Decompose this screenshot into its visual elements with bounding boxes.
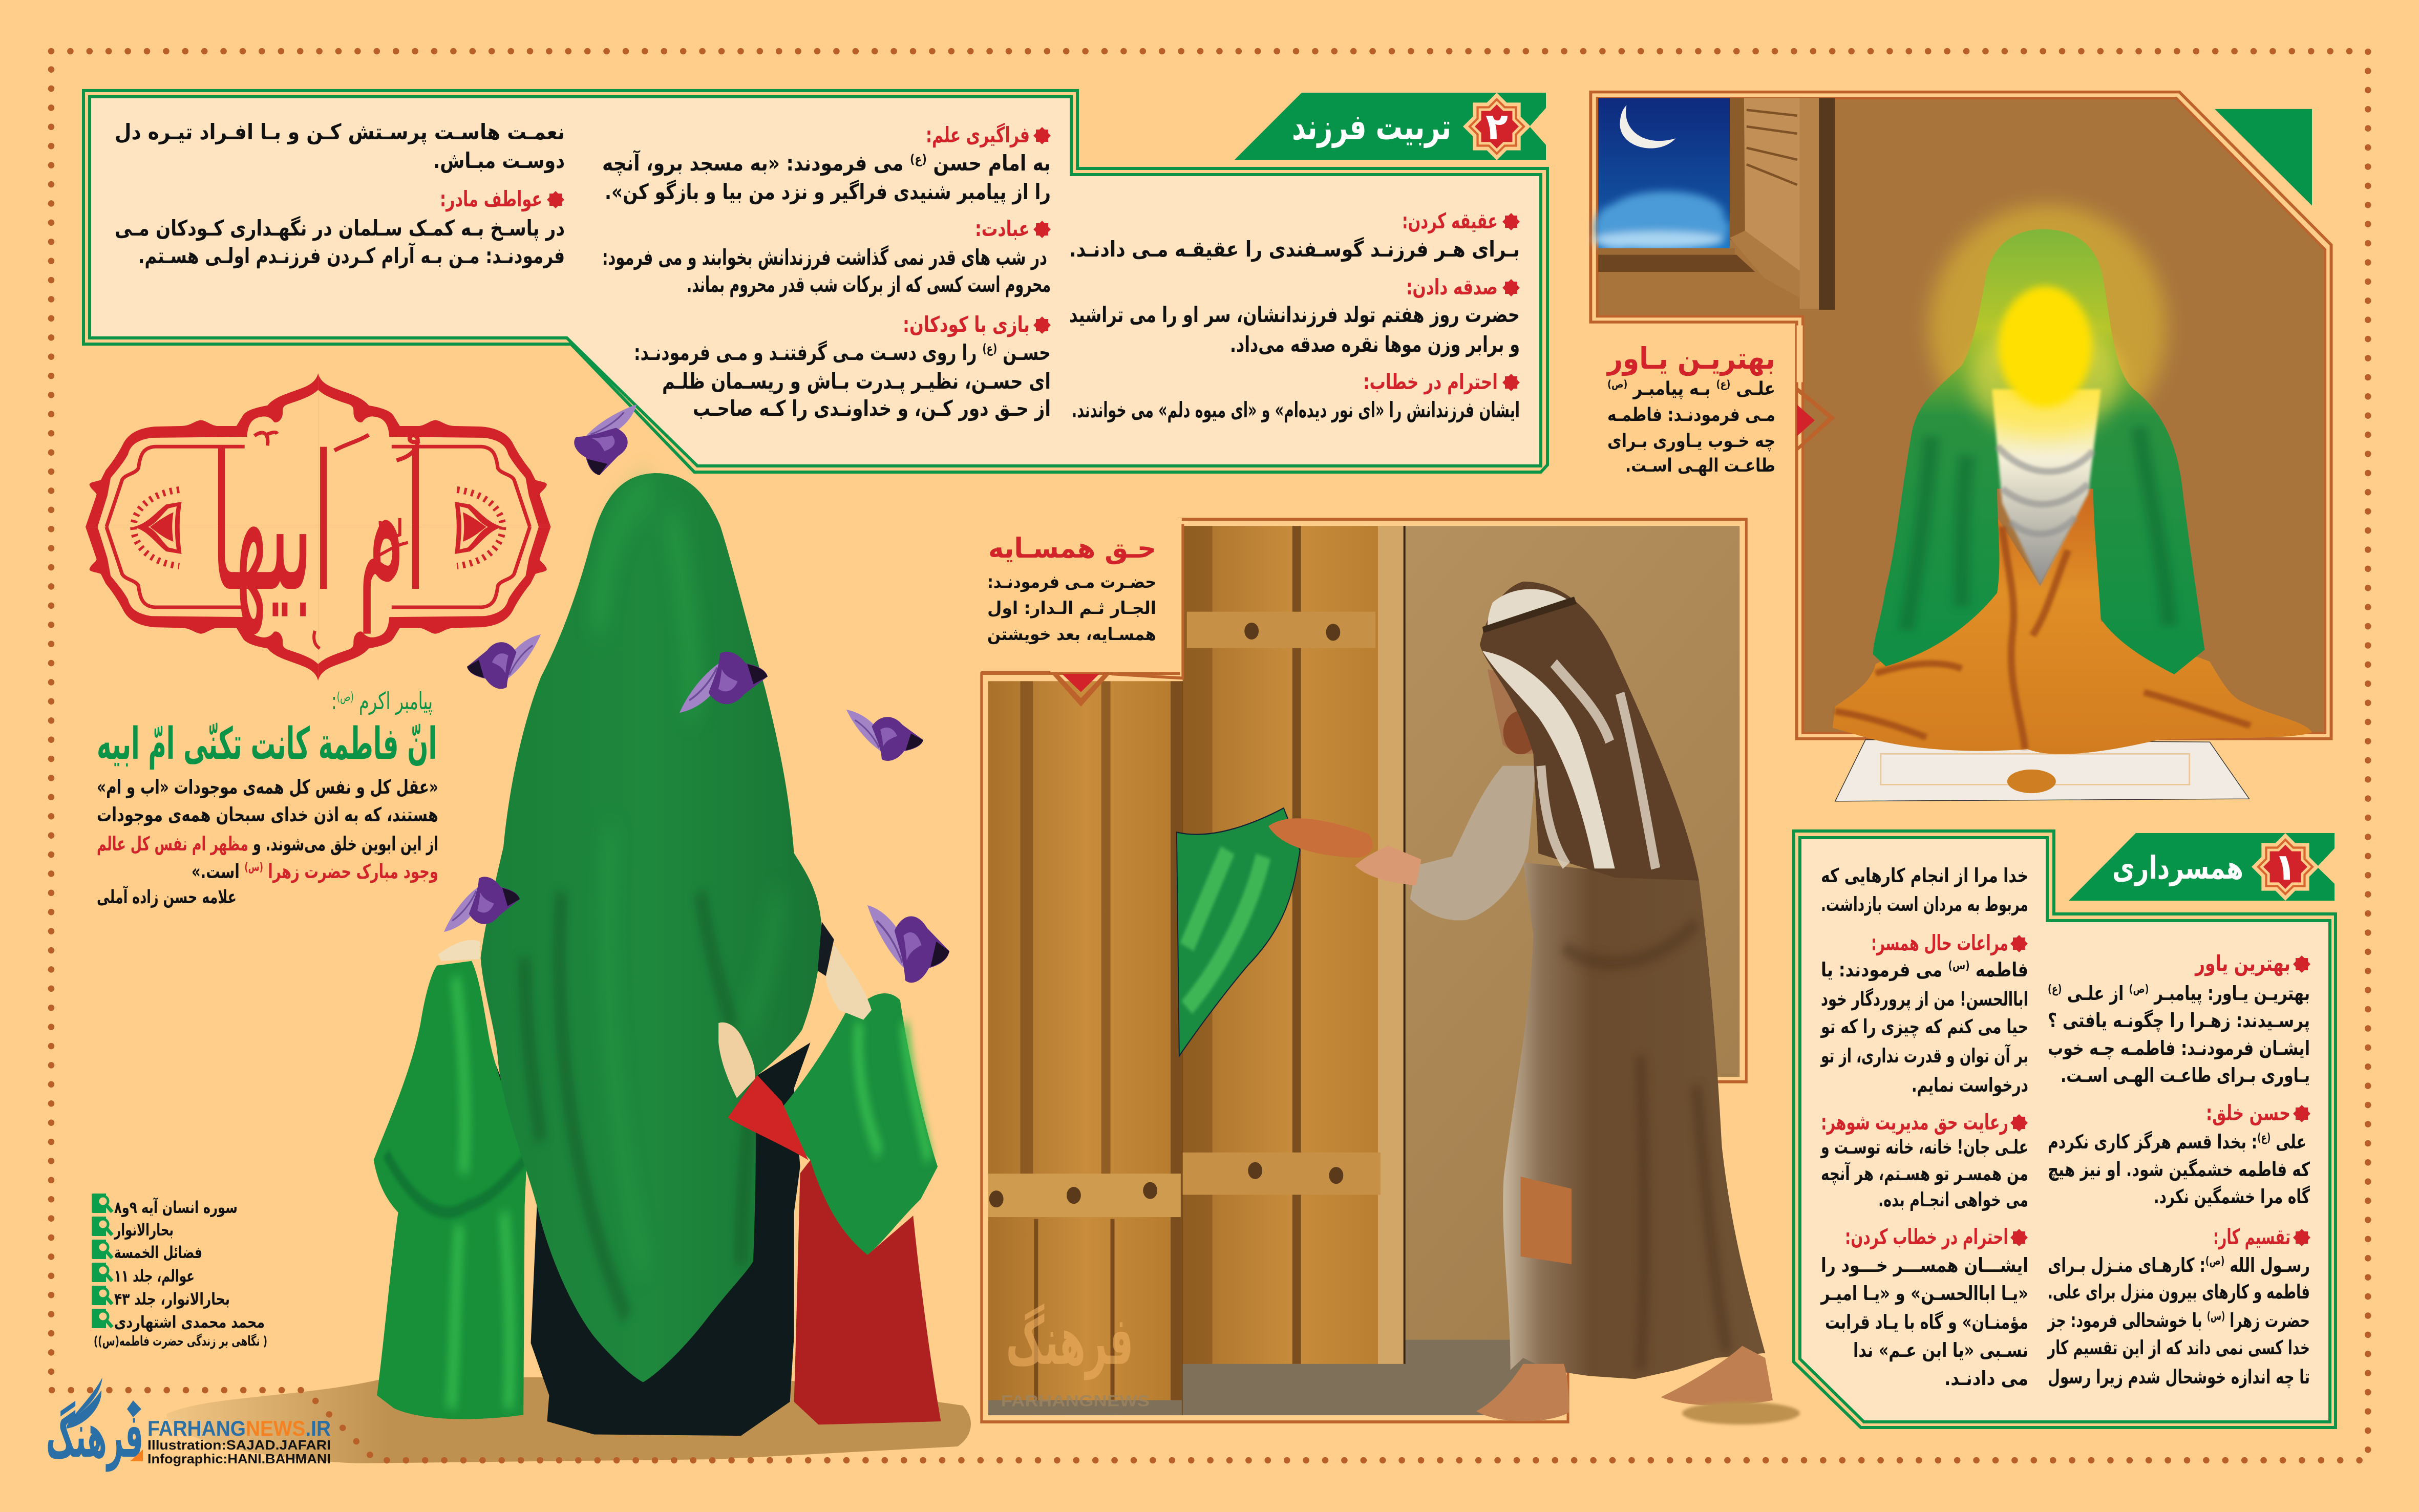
watermark: فرهنگ bbox=[1006, 1303, 1133, 1380]
text column 2 bbox=[602, 122, 1051, 421]
mother's green mantle bbox=[481, 473, 822, 1382]
icon: number star 2 bbox=[1463, 93, 1531, 160]
mother's dark dress bbox=[486, 1042, 810, 1436]
section title: همسرداری bbox=[2112, 849, 2243, 886]
text column 2: (ع) bbox=[982, 342, 997, 356]
caption: neighbour rights: همسـایه، بعد خویشتن bbox=[987, 624, 1156, 645]
text column 2: عبادت: bbox=[975, 216, 1030, 241]
credits: Illustration:SAJAD.JAFARI bbox=[147, 1437, 331, 1453]
moon bbox=[1620, 105, 1675, 148]
mother's hand on daughter bbox=[438, 940, 480, 961]
halo bbox=[1929, 205, 2167, 451]
hands bbox=[718, 922, 872, 1098]
banner: section 2 heading bbox=[1235, 93, 1546, 160]
text right column: تقسیم کار: bbox=[2213, 1224, 2290, 1249]
quote block: علامه حسن زاده آملی bbox=[97, 885, 237, 908]
text column 3: ایشان فرزندانش را «ای نور دیده‌ام» و «ای میوه دلم» می خواندند. bbox=[1072, 397, 1520, 423]
text left column: ایشـــان همســـر خـــود را bbox=[1821, 1254, 2028, 1276]
clouds bbox=[1592, 191, 1729, 252]
panel border bbox=[982, 519, 1746, 1422]
watermark: FARHANGNEWS bbox=[1001, 1392, 1150, 1410]
beard bbox=[1503, 711, 1538, 754]
text right column: از علـی bbox=[2062, 982, 2129, 1005]
text column 3 bbox=[1069, 208, 1520, 423]
text column 2: در شب های قدر نمی گذاشت فرزندانش بخوابند و می فرمود: bbox=[602, 245, 1047, 270]
text right column: (ص) bbox=[2129, 983, 2149, 996]
mother and daughters illustration bbox=[374, 473, 941, 1436]
old man bbox=[1355, 582, 1773, 1421]
text column 2: می فرمودند: «به مسجد برو، آنچه bbox=[602, 150, 910, 176]
text left column: اباالحسن! من از پروردگار خود bbox=[1821, 988, 2028, 1011]
green cloak bbox=[782, 993, 938, 1255]
banner: section 1 heading bbox=[2069, 833, 2335, 901]
text column 3: صدقه دادن: bbox=[1406, 274, 1498, 300]
caption: best helper: بـه پیامبـر bbox=[1627, 378, 1716, 399]
green veil bbox=[1873, 229, 2204, 674]
text right column: خدا کسی نمی داند که از این تقسیم کار bbox=[2047, 1336, 2310, 1359]
text right column: : کارهـای منـزل بـرای bbox=[2048, 1254, 2205, 1276]
caption: best helper: مـی فرمودنـد: فاطمـه bbox=[1607, 404, 1775, 425]
text left column: من همسـر تو هسـتم، هر آنچه bbox=[1821, 1161, 2028, 1185]
text column 2: به امام حسن bbox=[934, 151, 1072, 176]
text column 1 bbox=[115, 119, 565, 269]
right daughter bbox=[782, 993, 941, 1424]
text column 3: و برابر وزن موها نقره صدقه می‌داد. bbox=[1230, 332, 1520, 357]
text left column: نسـبی «یا ابن عـم» ندا bbox=[1853, 1339, 2028, 1362]
caption: best helper: (ع) bbox=[1716, 378, 1730, 390]
text right column: فاطمه و کارهای بیرون منزل برای علی. bbox=[2048, 1281, 2310, 1304]
text column 1: در پاسـخ بـه کمـک سـلمان در نگهـداری کـودکان مـی bbox=[115, 216, 565, 241]
text left column: درخواست نمایم. bbox=[1912, 1074, 2028, 1097]
text column 2: حسـن bbox=[1005, 340, 1069, 365]
explanatory text: «عقل کل و نفس کل همه‌ی موجودات «اب و ام» bbox=[97, 776, 438, 799]
feet bbox=[1476, 1364, 1569, 1421]
caption: neighbour rights: الجـار ثـم الـدار: اول bbox=[987, 598, 1156, 619]
ornamental frame bbox=[86, 373, 551, 681]
sources list: سوره انسان آیه ۹و۸ bbox=[114, 1197, 238, 1217]
head cloth bbox=[1480, 582, 1699, 881]
text column 2: محروم است کسی که از برکات شب قدر محروم بماند. bbox=[687, 272, 1051, 297]
icon: number star 1: ۱ bbox=[2274, 845, 2297, 888]
site name: FARHANGNEWS.IR bbox=[147, 1416, 331, 1440]
panel: child rearing bbox=[83, 91, 1547, 472]
text right column: (ع) bbox=[2048, 983, 2062, 996]
text column 3: بـرای هـر فرزنـد گوسـفندی را عقیقـه مـی دادنـد. bbox=[1069, 237, 1520, 262]
text column 2: بازی با کودکان: bbox=[903, 312, 1030, 337]
woman's green sleeve and bread bbox=[1177, 808, 1373, 1056]
text column 3: حضرت روز هفتم تولد فرزندانشان، سر او را می تراشید bbox=[1069, 302, 1520, 328]
text left column: مراعات حال همسر: bbox=[1871, 930, 2008, 956]
text left column: علـی جان! خانه، خانه توسـت و bbox=[1820, 1136, 2028, 1159]
watermark bbox=[1001, 1303, 1150, 1410]
text right column: ایشـان فرمودنـد: فاطمـه چـه خوب bbox=[2048, 1037, 2310, 1059]
quote attribution: : bbox=[331, 687, 337, 715]
text column 3: عقیقه کردن: bbox=[1402, 208, 1498, 234]
text left column: مربوط به مردان است بازداشت. bbox=[1821, 893, 2028, 915]
sources list: عوالم، جلد ۱۱ bbox=[114, 1266, 195, 1286]
butterflies bbox=[444, 404, 949, 983]
text left column: خدا مرا از انجام کارهایی که bbox=[1821, 864, 2028, 887]
panel border and wall bbox=[1590, 92, 2331, 739]
figure in prayer bbox=[1833, 205, 2312, 801]
caption: best helper: (ص) bbox=[1607, 378, 1627, 390]
sources list: محمد محمدی اشتهاردی bbox=[114, 1312, 265, 1332]
arrow: chevron right bbox=[1797, 387, 1835, 452]
text right column: : بخدا قسم هرگز کاری نکردم bbox=[2048, 1131, 2257, 1154]
robe bbox=[1503, 862, 1765, 1379]
quote block: است.» bbox=[192, 860, 244, 883]
quote attribution: پیامبر اکرم bbox=[361, 687, 468, 715]
text column 2: ای حسـن، نظیـر پـدرت بـاش و ریسـمان ظلـم bbox=[662, 369, 1051, 394]
left door bbox=[988, 675, 1183, 1418]
text right column: تا چه اندازه خوشحال شدم زیرا رسول bbox=[2048, 1366, 2310, 1389]
quote block: از این ابوین خلق می‌شوند. و مظهر ام نفس کل عالم bbox=[97, 833, 438, 856]
title emblem: frame with calligraphy: ام ابیها bbox=[211, 416, 426, 635]
green corner triangle bbox=[2215, 109, 2312, 206]
text column 2: (ع) bbox=[910, 152, 927, 166]
text right column: پرسـیدند: زهـرا را چگونـه یافتی ؟ bbox=[2048, 1009, 2310, 1032]
quote block: هستند، که به اذن خدای سبحان همه‌ی موجودات bbox=[97, 803, 438, 826]
caption: best helper: چه خـوب یـاوری بـرای bbox=[1607, 431, 1775, 452]
text column 1: فرمودنـد: مـن بـه آرام کـردن فرزنـدم اولـی هسـتم. bbox=[138, 243, 565, 269]
text left column: «یـا اباالحسـن» و «یـا امیـر bbox=[1820, 1282, 2028, 1305]
panel: spousal duties bbox=[1794, 831, 2336, 1428]
caption: best helper: بهتریـن یـاور bbox=[1606, 341, 1775, 376]
text column 2: را از پیامبر شنیدی فراگیر و نزد من بیا و بازگو کن». bbox=[605, 179, 1051, 205]
panel: best helper illustration bbox=[1590, 92, 2331, 801]
text right column: (ص) bbox=[2205, 1255, 2224, 1268]
text right column: (س) bbox=[2207, 1310, 2225, 1323]
panel border bbox=[83, 91, 1547, 472]
text right column: علی bbox=[2278, 1131, 2319, 1153]
centre door bbox=[1182, 526, 1406, 1364]
prayer mat bbox=[1835, 740, 2249, 801]
child's red sleeve over mantle bbox=[728, 1075, 809, 1160]
text column 2: از حـق دور کـن، و خداونـدی را کـه صاحـب bbox=[693, 396, 1051, 421]
sources list: بحارالانوار، جلد ۴۳ bbox=[114, 1289, 230, 1309]
text right column: بهتریـن یـاور: پیامبـر bbox=[2156, 982, 2354, 1005]
text left column: رعایت حق مدیریت شوهر: bbox=[1821, 1110, 2008, 1135]
patch bbox=[1521, 1177, 1572, 1264]
text left column: می فرمودند: یا bbox=[1821, 959, 1948, 981]
Arabic quote: انّ فاطمة کانت تکنّی امّ ابیه bbox=[97, 718, 437, 770]
logo mark bbox=[46, 1377, 143, 1472]
text left column: احترام در خطاب کردن: bbox=[1845, 1224, 2008, 1250]
text column 1: عواطف مادر: bbox=[440, 186, 542, 212]
logo and credits: Infographic:HANI.BAHMANI bbox=[147, 1451, 331, 1466]
bread bbox=[1268, 818, 1373, 858]
hand bbox=[1355, 845, 1421, 885]
text left column: می خواهی انجـام بده. bbox=[1878, 1188, 2028, 1211]
text left column: فاطمه bbox=[1977, 959, 2040, 981]
left arm bbox=[1410, 766, 1536, 920]
ground shadow of mother and daughters bbox=[166, 1377, 971, 1463]
text column 1: دوسـت مبـاش. bbox=[433, 148, 565, 174]
foot shadow right of man bbox=[1682, 1402, 1800, 1424]
sources list: فضائل الخمسة bbox=[114, 1243, 202, 1262]
left daughter bbox=[374, 940, 527, 1419]
arrow: chevron down bbox=[1050, 672, 1112, 707]
text left column: حیا می کنم که چیزی را که تو bbox=[1820, 1015, 2028, 1038]
section title: تربیت فرزند bbox=[1292, 106, 1451, 148]
orange robe bbox=[1833, 484, 2312, 754]
caption: neighbour rights: حضـرت مـی فرمودنـد: bbox=[987, 572, 1156, 592]
panel: neighbour rights illustration bbox=[981, 518, 1773, 1422]
text column 1: نعمـت هاسـت پرسـتش کـن و بـا افـراد تیـره دل bbox=[115, 119, 565, 145]
face bbox=[1488, 669, 1538, 754]
logo and credits bbox=[46, 1377, 331, 1472]
caption: neighbour rights: حـق همسـایه bbox=[988, 532, 1156, 564]
caption background notch bbox=[981, 518, 1182, 672]
quote block: (س) bbox=[244, 861, 263, 874]
window with night sky bbox=[1592, 98, 1835, 310]
title emblem: frame with calligraphy bbox=[86, 373, 551, 681]
text left column bbox=[1820, 864, 2028, 1390]
text left column: مؤمنـان» و گاه با یـاد قرابت bbox=[1825, 1311, 2028, 1334]
text right column: رسـول الله bbox=[2232, 1254, 2338, 1276]
text right column: یـاوری بـرای طاعـت الهـی اسـت. bbox=[2061, 1064, 2310, 1087]
text right column bbox=[2047, 951, 2310, 1389]
open shutter bbox=[1730, 98, 1835, 310]
wall, doors and floor bbox=[988, 524, 1742, 1418]
text right column: حضرت زهرا bbox=[2232, 1309, 2347, 1332]
quote attribution: (ص) bbox=[337, 690, 354, 704]
sources list: بحارالانوار bbox=[114, 1220, 174, 1240]
red dress bbox=[794, 1160, 941, 1424]
text right column: که فاطمه خشمگین شود. او نیز هیچ bbox=[2048, 1158, 2310, 1181]
icon: number star 2: ۲ bbox=[1486, 105, 1508, 148]
icon: number star 1 bbox=[2252, 833, 2319, 901]
sources list bbox=[92, 1194, 267, 1349]
text right column: با خوشحالی فرمود: جز bbox=[2047, 1309, 2207, 1332]
panel border bbox=[1794, 831, 2336, 1428]
text column 3: احترام در خطاب: bbox=[1363, 369, 1498, 395]
glowing face bbox=[1969, 323, 2121, 437]
text left column: (س) bbox=[1948, 960, 1970, 972]
caption: neighbour rights bbox=[987, 532, 1156, 645]
text right column: (ع) bbox=[2257, 1132, 2271, 1144]
text column 2: فراگیری علم: bbox=[926, 122, 1030, 148]
text left column: بر آن توان و قدرت نداری، از تو bbox=[1820, 1044, 2028, 1068]
text left column: می دادنـد. bbox=[1944, 1367, 2028, 1390]
caption: best helper: طاعـت الهـی اسـت. bbox=[1625, 455, 1775, 476]
quote block: وجود مبارک حضرت زهرا bbox=[263, 860, 438, 883]
text right column: بهترین یاور bbox=[2194, 951, 2290, 976]
caption: best helper: علـی bbox=[1737, 378, 1782, 399]
text right column: حسن خلق: bbox=[2206, 1100, 2290, 1126]
sources list: ( نگاهی بر زندگی حضرت فاطمه(س)) bbox=[94, 1333, 267, 1349]
caption: best helper bbox=[1606, 341, 1775, 476]
quote block bbox=[97, 687, 438, 908]
white cloth bbox=[1992, 389, 2101, 586]
text right column: گاه مرا خشمگین نکرد. bbox=[2154, 1185, 2310, 1208]
logo and credits: فرهنگ bbox=[46, 1400, 143, 1472]
text column 2: را روی دسـت مـی گرفتنـد و مـی فرمودنـد: bbox=[634, 340, 982, 366]
